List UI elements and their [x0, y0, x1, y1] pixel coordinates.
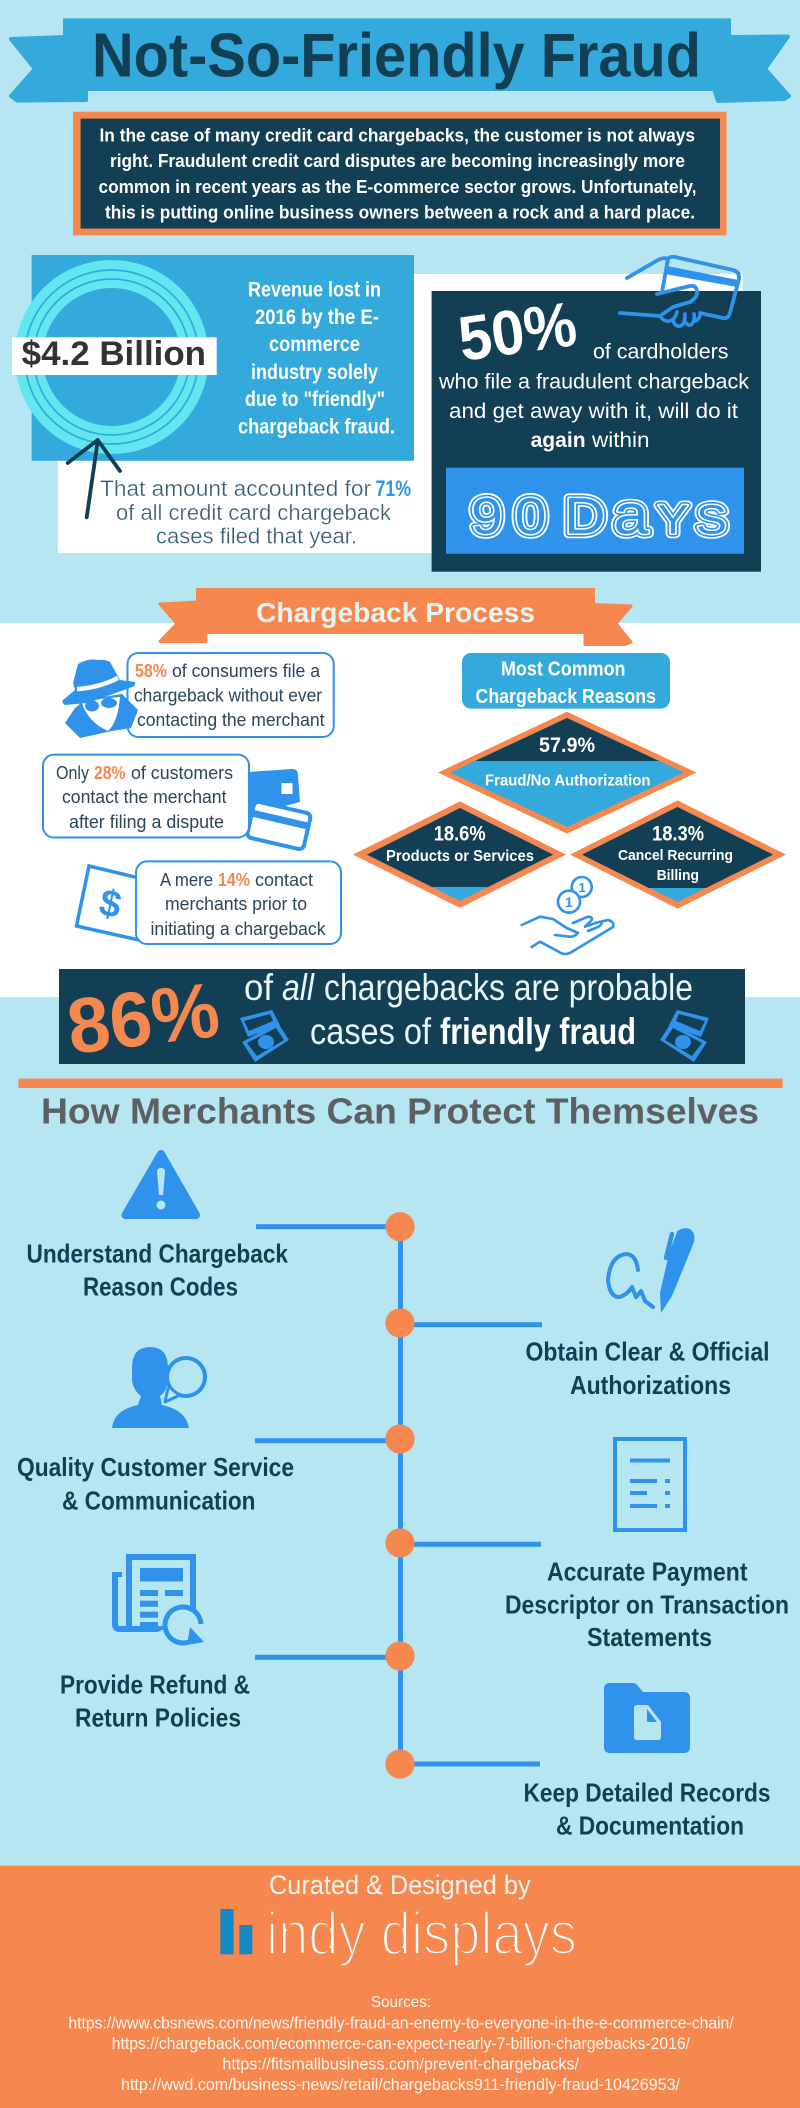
diamond: fraud no authorization: Fraud/No Authorization	[485, 772, 650, 789]
intro text box	[73, 112, 726, 235]
banner text	[244, 967, 693, 1052]
icon: pen and signature	[608, 1228, 694, 1313]
diamond: cancel recurring billing: Cancel Recurring	[618, 847, 733, 864]
90 days box: a	[614, 483, 649, 546]
intro text box: In the case of many credit card chargebacks, the customer is not always	[100, 126, 695, 146]
item: payment descriptor	[505, 1439, 789, 1652]
banner text: cases of	[310, 1011, 432, 1052]
revenue text: commerce	[269, 333, 360, 356]
71 percent note	[100, 476, 411, 548]
amount label: $4.2 Billion	[22, 335, 206, 373]
stat: 14 percent: contact	[255, 869, 313, 890]
icon: document	[615, 1439, 685, 1530]
panel: most common reasons heading: Chargeback Reasons	[476, 686, 656, 708]
section: chargeback process background	[0, 623, 800, 997]
icon: warning triangle	[126, 1154, 196, 1215]
revenue text: 2016 by the E-	[255, 306, 379, 329]
item: refund policies: Return Policies	[75, 1703, 241, 1733]
panel: 50 percent	[432, 257, 761, 572]
sources: https://www.cbsnews.com/news/friendly-fraud-an-enemy-to-everyone-in-the-e-commerce-chain/	[68, 2013, 734, 2032]
stat: 14 percent: merchants prior to	[165, 893, 307, 914]
stat: 14 percent: 14%	[218, 869, 250, 890]
diamond: products or services: 18.6%	[434, 822, 486, 845]
icon: hand with coins	[522, 877, 613, 954]
icon: money right	[660, 1010, 709, 1062]
diamond: cancel recurring billing	[570, 800, 786, 909]
diamond: products or services	[353, 801, 566, 908]
revenue text	[238, 279, 395, 439]
90 days box: 0	[515, 488, 546, 545]
sources: https://chargeback.com/ecommerce-can-expect-nearly-7-billion-chargebacks-2016/	[112, 2034, 690, 2053]
stat: 14 percent: initiating a chargeback	[150, 918, 326, 939]
item: authorizations	[526, 1228, 770, 1400]
chargeback process banner	[160, 588, 631, 644]
stat: 28 percent: after filing a dispute	[69, 811, 224, 832]
logo: indy displays: indy displays	[266, 1900, 577, 1967]
cardholders text: of cardholders	[593, 341, 728, 364]
banner text: of	[244, 967, 274, 1008]
stat: 14 percent	[76, 861, 341, 944]
90 days box: 9	[471, 488, 503, 545]
panel: revenue lost	[12, 255, 743, 553]
item: refund policies	[60, 1554, 250, 1733]
90 days box: D	[564, 488, 606, 545]
stat: 58 percent: contacting the merchant	[137, 709, 324, 730]
panel: most common reasons heading	[462, 653, 670, 709]
cardholders text: who file a fraudulent chargeback	[438, 370, 750, 393]
diamond: fraud no authorization: 57.9%	[539, 734, 595, 757]
cardholders text: again	[531, 429, 586, 452]
revenue text: due to "friendly"	[245, 388, 385, 411]
icon: hand with coins: 1	[578, 880, 586, 895]
sources: http://wwd.com/business-news/retail/chargebacks911-friendly-fraud-10426953/	[121, 2075, 680, 2094]
71 percent note: 71%	[376, 476, 411, 501]
item: customer service: & Communication	[62, 1485, 256, 1515]
icon: person with speech bubble	[112, 1347, 205, 1428]
stat: 58 percent	[62, 653, 334, 738]
intro text box: right. Fraudulent credit card disputes are becoming increasingly more	[110, 151, 685, 171]
cardholders text: and get away with it, will do it	[449, 400, 738, 423]
stat: 58 percent: 58%	[135, 660, 167, 681]
item: customer service	[17, 1347, 294, 1515]
panel: most common reasons heading: Most Common	[501, 659, 626, 681]
diamond: fraud no authorization	[438, 712, 696, 834]
90 days box	[446, 468, 744, 554]
diamond: products or services: Products or Services	[386, 848, 534, 865]
item: detailed records: & Documentation	[556, 1810, 744, 1840]
title: Not-So-Friendly Fraud	[92, 22, 701, 90]
icon: spy	[62, 660, 138, 738]
stat: 28 percent: of customers	[131, 762, 233, 783]
arrow	[68, 440, 120, 517]
revenue text: chargeback fraud.	[238, 416, 395, 439]
curated by: Curated & Designed by	[269, 1870, 531, 1900]
sources	[68, 1994, 734, 2094]
71 percent note: That amount accounted for	[100, 476, 371, 501]
71 percent note: cases filed that year.	[156, 523, 357, 548]
banner text: all	[282, 967, 316, 1008]
banner: 86 percent	[59, 965, 745, 1071]
banner text: chargebacks are probable	[324, 967, 693, 1008]
item: authorizations: Authorizations	[570, 1370, 731, 1400]
item: authorizations: Obtain Clear & Official	[526, 1337, 770, 1367]
cardholders text	[438, 341, 750, 452]
item: payment descriptor: Accurate Payment	[547, 1556, 748, 1586]
intro text box: this is putting online business owners between a rock and a hard place.	[105, 202, 695, 222]
86 percent figure: 86%	[62, 965, 224, 1071]
50 percent figure: 50%	[454, 289, 581, 375]
stat: 14 percent: A mere	[160, 869, 213, 890]
icon: money left	[240, 1010, 289, 1062]
banner text: friendly fraud	[440, 1011, 636, 1052]
ring graphic	[25, 270, 199, 444]
item: detailed records	[524, 1683, 770, 1840]
90 days box: S	[696, 498, 727, 543]
item: refund policies: Provide Refund &	[60, 1669, 250, 1699]
stat: 28 percent	[43, 755, 311, 850]
icon: dollar card	[76, 866, 152, 940]
timeline	[255, 1212, 542, 1779]
icon: hand holding card	[620, 257, 739, 326]
revenue text: Revenue lost in	[248, 279, 381, 302]
icon: credit cards	[240, 769, 311, 850]
footer	[0, 1866, 800, 2108]
icon: dollar card: $	[96, 882, 125, 927]
intro text box: common in recent years as the E-commerce sector grows. Unfortunately,	[98, 177, 696, 197]
icon: folder	[604, 1683, 690, 1753]
heading: how merchants can protect themselves: How Merchants Can Protect Themselves	[41, 1091, 759, 1132]
divider bar	[18, 1079, 783, 1088]
item: detailed records: Keep Detailed Records	[524, 1777, 770, 1807]
chargeback process banner: Chargeback Process	[256, 597, 535, 628]
item: customer service: Quality Customer Service	[17, 1452, 294, 1482]
item: reason codes	[26, 1154, 288, 1302]
sources: https://fitsmallbusiness.com/prevent-chargebacks/	[222, 2054, 579, 2073]
stat: 58 percent: of consumers file a	[172, 660, 321, 681]
stat: 28 percent: 28%	[94, 762, 126, 783]
icon: newspaper with refresh arrow	[112, 1554, 206, 1648]
icon: hand with coins: 1	[565, 894, 573, 910]
item: reason codes: Reason Codes	[83, 1272, 238, 1302]
cardholders text: within	[591, 429, 650, 452]
item: payment descriptor: Statements	[587, 1622, 712, 1652]
revenue text: industry solely	[251, 361, 378, 384]
stat: 28 percent: Only	[56, 762, 90, 783]
diamond: cancel recurring billing: Billing	[657, 867, 699, 884]
90 days box: Y	[658, 498, 688, 543]
sources: Sources:	[371, 1994, 431, 2011]
stat: 58 percent: chargeback without ever	[134, 684, 322, 705]
title banner	[11, 18, 789, 101]
diamond: cancel recurring billing: 18.3%	[652, 822, 704, 845]
stat: 28 percent: contact the merchant	[62, 786, 226, 807]
item: reason codes: Understand Chargeback	[26, 1238, 288, 1268]
71 percent note: of all credit card chargeback	[116, 500, 392, 525]
